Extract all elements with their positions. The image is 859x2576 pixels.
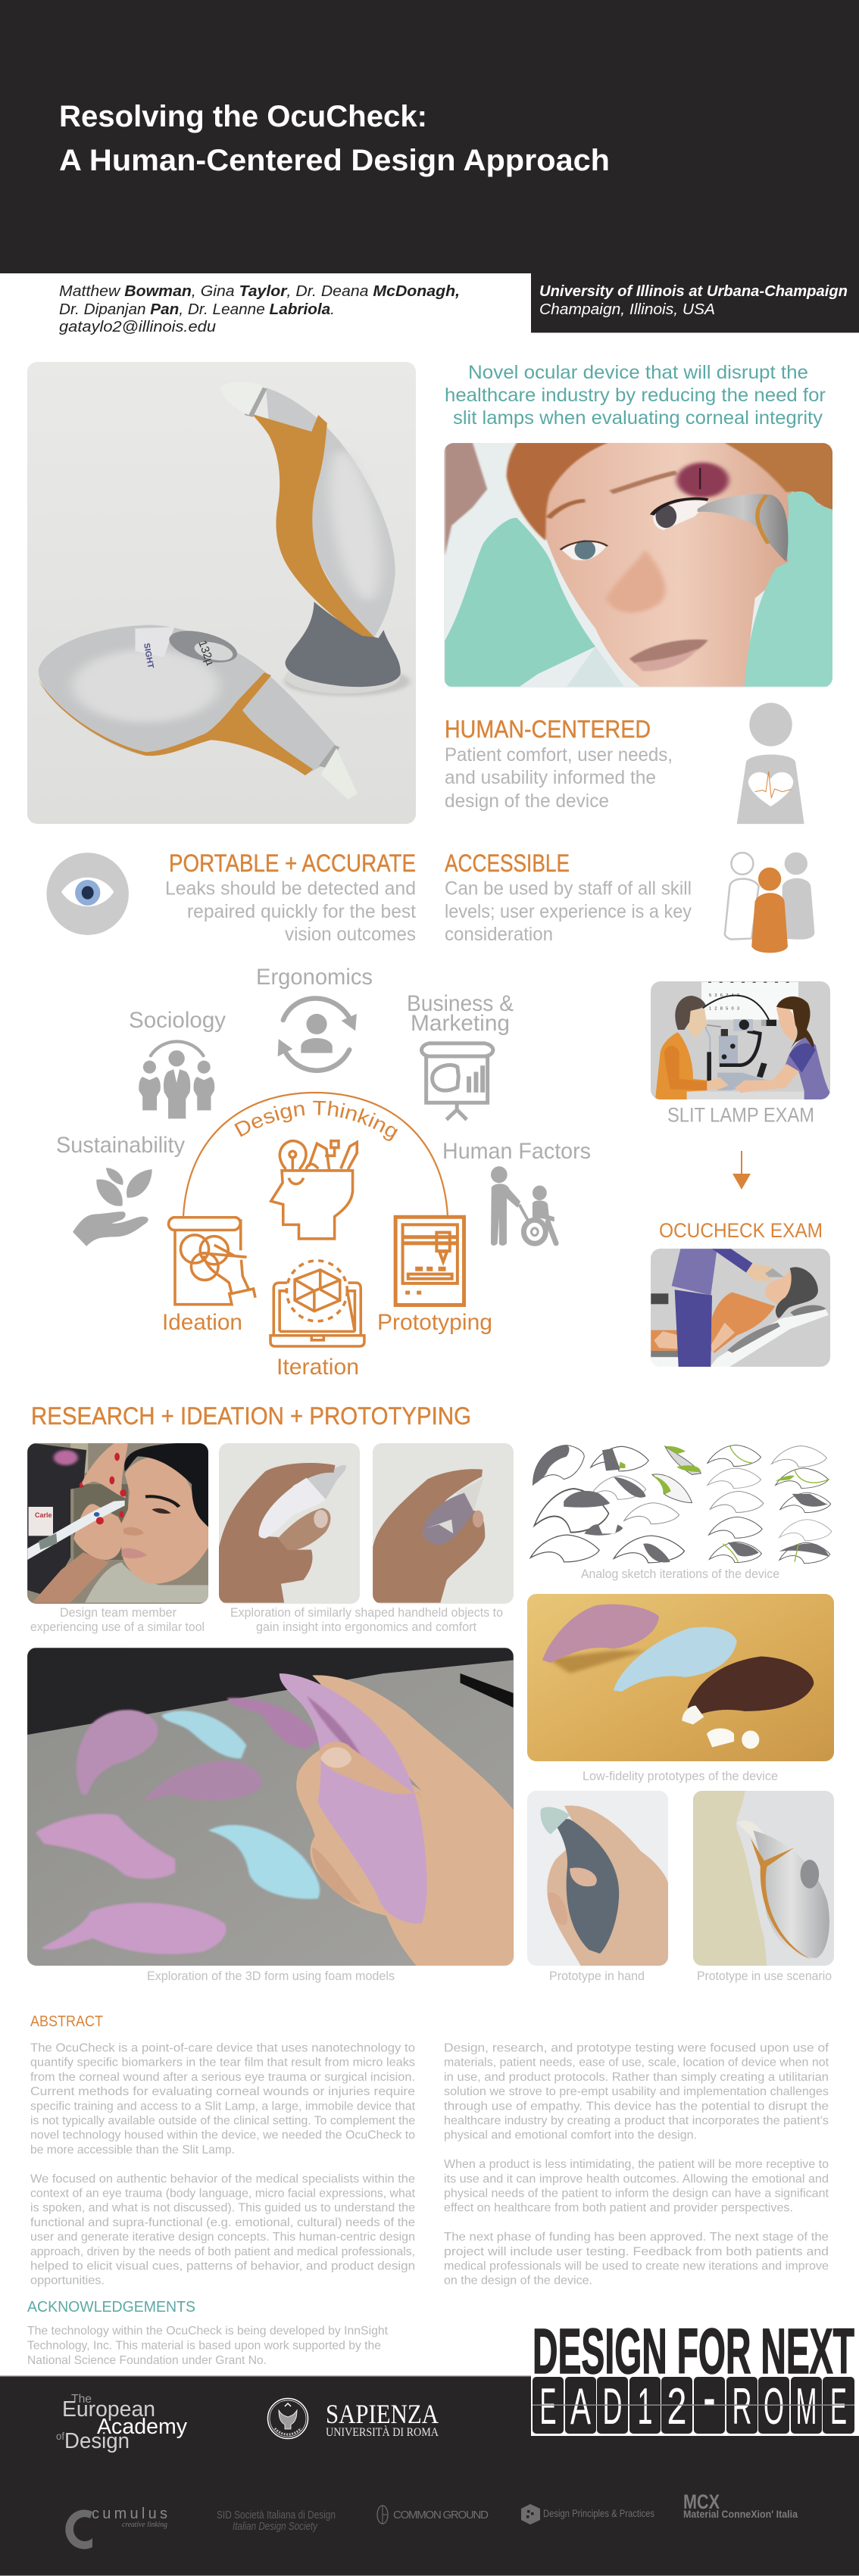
discipline labels: Human Factors [442, 1139, 591, 1164]
abstract: right column: The next phase of funding has been approved. The next stage of the [444, 2231, 829, 2244]
conference mark: EAD12 Rome board: M [795, 2378, 817, 2435]
text: portable + accurate: PORTABLE + ACCURATE [169, 850, 416, 877]
logo: European Academy of Design: Academy [97, 2415, 187, 2439]
title: A Human-Centered Design Approach [59, 144, 610, 177]
conference mark: EAD12 Rome board: - [703, 2369, 715, 2427]
text: portable + accurate [165, 850, 416, 945]
abstract: right column [444, 2041, 829, 2288]
abstract: right column: solution we strove to pre-empt usability and implementation challenges [444, 2085, 829, 2098]
abstract: right column: effect on healthcare from both patient and provider perspectives. [444, 2202, 793, 2215]
abstract: right column: When a product is less intimidating, the patient will be more receptive to [444, 2158, 829, 2171]
authors: gataylo2@illinois.edu [59, 319, 216, 335]
abstract: right column: project will include user testing. Feedback from both patients and [444, 2245, 829, 2258]
authors: Dr. Dipanjan Pan, Dr. Leanne Labriola. [59, 301, 335, 318]
abstract: left column: We focused on authentic behavior of the medical specialists within the [30, 2172, 415, 2185]
abstract: left column: approach, driven by the needs of both patient and medical professionals, [30, 2245, 415, 2258]
sketches: analog iterations [530, 1445, 832, 1564]
discipline labels: Marketing [411, 1011, 510, 1036]
acknowledgements: National Science Foundation under Grant No. [27, 2354, 267, 2367]
abstract: left column [30, 2013, 416, 2288]
text: portable + accurate: repaired quickly for the best [187, 901, 416, 922]
conference mark: EAD12 Rome board: R [732, 2378, 751, 2435]
process labels: Prototyping [377, 1310, 492, 1335]
footer band [0, 2375, 859, 2576]
text: accessible: consideration [445, 924, 553, 945]
photo: device used on patient's eye [444, 442, 835, 688]
photo: OcuCheck devices: 132µ [195, 639, 217, 667]
text: accessible [445, 850, 692, 945]
caption: low-fidelity prototypes: Low-fidelity prototypes of the device [583, 1769, 778, 1783]
acknowledgements: The technology within the OcuCheck is being developed by InnSight [27, 2325, 389, 2337]
captions: prototypes: Prototype in hand [549, 1969, 645, 1983]
logo: Material ConneXion Italia [683, 2490, 798, 2520]
text: accessible: Can be used by staff of all skill [445, 878, 692, 900]
abstract: right column: medical professionals will be used to create new iterations and improve [444, 2259, 829, 2273]
photo: team member using similar tool: Carle [35, 1511, 52, 1519]
label: slit lamp exam: SLIT LAMP EXAM [667, 1104, 814, 1127]
illustration: slit lamp exam: 1 2 8 5 0 3 [709, 1006, 739, 1011]
affiliation [539, 283, 848, 318]
logo: Cumulus [65, 2506, 167, 2549]
abstract: left column: from the corneal wound after a serious eye trauma or surgical incision. [30, 2071, 415, 2084]
abstract: left column: quantify specific biomarkers in the tear film that result from micro leaks [30, 2057, 415, 2069]
header band [0, 0, 859, 333]
title [59, 100, 610, 177]
icon: human factors [491, 1166, 556, 1246]
logo: Italian Design Society [217, 2509, 336, 2533]
captions: prototypes [549, 1969, 832, 1983]
photo: OcuCheck devices: SIGHT [142, 642, 155, 669]
text: human-centered: design of the device [445, 791, 609, 812]
abstract: right column: in use, and product protocols. Rather than simply creating a utilitarian [444, 2071, 829, 2084]
logo: Design Principles and Practices: Design Principles & Practices [543, 2507, 654, 2519]
abstract: left column: is spoken, and what is not discussed). This guided us to understand the [30, 2202, 415, 2215]
abstract: right column: physical needs of the patient to inform the design can have a significant [444, 2187, 829, 2200]
photo: OcuCheck devices [27, 362, 416, 824]
process labels: Ideation [162, 1310, 242, 1335]
standing device and stand [244, 388, 411, 697]
icon: sustainability [73, 1168, 152, 1246]
text: human-centered: Patient comfort, user needs, [445, 744, 673, 766]
photo: low-fidelity prototypes [527, 1594, 834, 1761]
discipline labels: Business & [407, 991, 514, 1016]
captions: research photos: Design team member [60, 1605, 176, 1620]
abstract: left column: be more accessible than the Slit Lamp. [30, 2144, 235, 2157]
logo: European Academy of Design: The [71, 2393, 92, 2406]
abstract: left column: user and generate iterative design concepts. This human-centric design [30, 2231, 415, 2244]
sketch fills [533, 1445, 829, 1562]
icon: sociology [139, 1041, 214, 1118]
icon: head [271, 1141, 357, 1239]
caption: sketches: Analog sketch iterations of the device [581, 1567, 779, 1581]
photo: prototype in hand [527, 1791, 668, 1966]
abstract: right column: its use and it can improve health outcomes. Allowing the emotional and [444, 2172, 829, 2185]
captions: research photos: experiencing use of a similar tool [30, 1620, 205, 1634]
arch [183, 1093, 448, 1216]
abstract: left column: is not typically available outside of the clinical setting. To complement the [30, 2114, 415, 2128]
text: human-centered: and usability informed the [445, 767, 656, 788]
captions: research photos: Exploration of similarly shaped handheld objects to [230, 1605, 503, 1620]
text: accessible: ACCESSIBLE [445, 850, 570, 877]
abstract: right column: on the design of the device. [444, 2275, 592, 2288]
conference mark: EAD12 Rome board: A [570, 2378, 591, 2435]
abstract: left column: context of an eye trauma (body language, micro facial expressions, what [30, 2187, 416, 2200]
icons in true proportions [73, 998, 364, 1346]
icon: laptop with cube [270, 1261, 364, 1346]
icon: ideation [169, 1218, 255, 1305]
affiliation: University of Illinois at Urbana-Champaign [539, 283, 848, 300]
title: Resolving the OcuCheck: [59, 100, 427, 133]
logo: European Academy of Design: Design [64, 2429, 130, 2453]
tagline: healthcare industry by reducing the need for [445, 385, 826, 406]
logo: Italian Design Society: SID Società Italiana di Design [217, 2509, 336, 2521]
photo: team member using similar tool [27, 1442, 208, 1604]
illustration: slit lamp exam [651, 981, 830, 1099]
photo: handheld object 2 [373, 1443, 514, 1604]
abstract: left column: functional and supra-functional (e.g. emotional, cultural) needs of the [30, 2216, 415, 2229]
photo: prototype in use [693, 1791, 834, 1966]
diagram: design thinking [56, 965, 591, 1380]
heading: research + ideation + prototyping: RESEARCH + IDEATION + PROTOTYPING [31, 1402, 471, 1430]
authors [59, 283, 460, 335]
captions: research photos [30, 1605, 503, 1634]
lying device [39, 624, 358, 800]
logo: Material ConneXion Italia: MCX [683, 2490, 720, 2513]
logo: Common Ground [377, 2506, 489, 2524]
label: ocucheck exam: OCUCHECK EXAM [659, 1219, 823, 1242]
arrow [732, 1151, 751, 1190]
abstract: left column: ABSTRACT [30, 2013, 103, 2030]
abstract: right column: through use of empathy. This device has the potential to disrupt the [444, 2100, 829, 2113]
illustration: ocucheck exam [651, 1249, 830, 1368]
discipline labels [56, 965, 591, 1164]
authors: Matthew Bowman , Gina Taylor, Dr. Deana McDonagh, [59, 283, 460, 300]
tagline: Novel ocular device that will disrupt the [468, 362, 808, 383]
icon: three people [725, 853, 814, 953]
logo: Design Principles and Practices [521, 2504, 654, 2525]
affiliation: Champaign, Illinois, USA [539, 301, 715, 318]
illustration: slit lamp exam: 5 3 6 2 4 3 [709, 993, 739, 998]
conference mark: EAD12 Rome board: 2 [667, 2378, 686, 2435]
abstract: right column: Design, research, and prototype testing were focused upon use of [444, 2041, 829, 2055]
photo: handheld object 1 [219, 1443, 360, 1604]
logo: Material ConneXion Italia: Material ConneXion' Italia [683, 2508, 798, 2520]
discipline labels: Sustainability [56, 1133, 185, 1158]
logo: Sapienza [268, 2399, 439, 2439]
icon: eye [46, 853, 129, 935]
conference mark: EAD12 Rome board: 1 [638, 2378, 653, 2435]
photo: foam models [27, 1648, 514, 1966]
text: accessible: levels; user experience is a key [445, 901, 692, 922]
icon: business and marketing board [422, 1043, 493, 1120]
abstract: left column: The OcuCheck is a point-of-care device that uses nanotechnology to [30, 2041, 415, 2055]
icon: ergonomics [278, 998, 357, 1071]
abstract: left column: specific training and access to a Slit Lamp, a large, immobile device that [30, 2100, 416, 2113]
conference mark: EAD12 Rome board [531, 2369, 859, 2436]
logo: Cumulus: creative linking [122, 2520, 167, 2529]
abstract: left column: opportunities. [30, 2275, 105, 2288]
discipline labels: Ergonomics [256, 965, 373, 990]
abstract: left column: Current methods for evaluating corneal wounds or injuries require [30, 2085, 415, 2098]
icon: 3D printer [395, 1217, 464, 1305]
abstract: left column: novel technology housed within the device, we needed the OcuCheck to [30, 2129, 415, 2142]
captions: research photos: gain insight into ergonomics and comfort [256, 1620, 476, 1634]
logo: European Academy of Design [56, 2393, 187, 2453]
process labels: Iteration [276, 1355, 359, 1380]
logo: Sapienza: UNIVERSITÀ DI ROMA [326, 2425, 439, 2439]
icons drawn over stretched coordinates [395, 1043, 556, 1305]
abstract: right column: materials, patient needs, ease of use, scale, location of device when not [444, 2057, 829, 2069]
process labels [162, 1310, 492, 1380]
tagline [445, 362, 826, 429]
acknowledgements [27, 2299, 389, 2367]
text: portable + accurate: vision outcomes [285, 924, 416, 945]
logo: Cumulus: cumulus [92, 2506, 167, 2522]
text: human-centered: HUMAN-CENTERED [445, 716, 651, 743]
conference mark: EAD12 Rome board: E [539, 2378, 556, 2435]
caption: foam models: Exploration of the 3D form using foam models [147, 1969, 395, 1983]
abstract: right column: physical and emotional comfort into the design. [444, 2129, 697, 2142]
acknowledgements: Technology, Inc. This material is based upon work supported by the [27, 2340, 381, 2353]
text: portable + accurate: Leaks should be detected and [165, 878, 416, 900]
logo: Italian Design Society: Italian Design Society [233, 2520, 318, 2533]
logo: Sapienza: SAPIENZA [326, 2399, 439, 2429]
logo: European Academy of Design: European [62, 2397, 155, 2422]
logo: Common Ground: COMMON GROUND [393, 2509, 489, 2521]
logo: European Academy of Design: of [56, 2430, 64, 2442]
arch label: Design Thinking [234, 1101, 398, 1141]
conference mark: EAD12 Rome board: D [603, 2378, 623, 2435]
seal [268, 2399, 308, 2438]
icon: person with heart [737, 703, 804, 824]
acknowledgements: ACKNOWLEDGEMENTS [27, 2299, 195, 2316]
text: human-centered [445, 716, 673, 812]
abstract: left column: helped to elicit visual cues, patterns of behavior, and product design [30, 2259, 415, 2273]
tagline: slit lamps when evaluating corneal integrity [453, 407, 823, 429]
captions: prototypes: Prototype in use scenario [697, 1969, 832, 1983]
conference mark: EAD12 Rome board: O [764, 2378, 784, 2435]
discipline labels: Sociology [129, 1008, 226, 1033]
abstract: right column: healthcare industry by creating a product that incorporates the patient’s [444, 2114, 829, 2128]
